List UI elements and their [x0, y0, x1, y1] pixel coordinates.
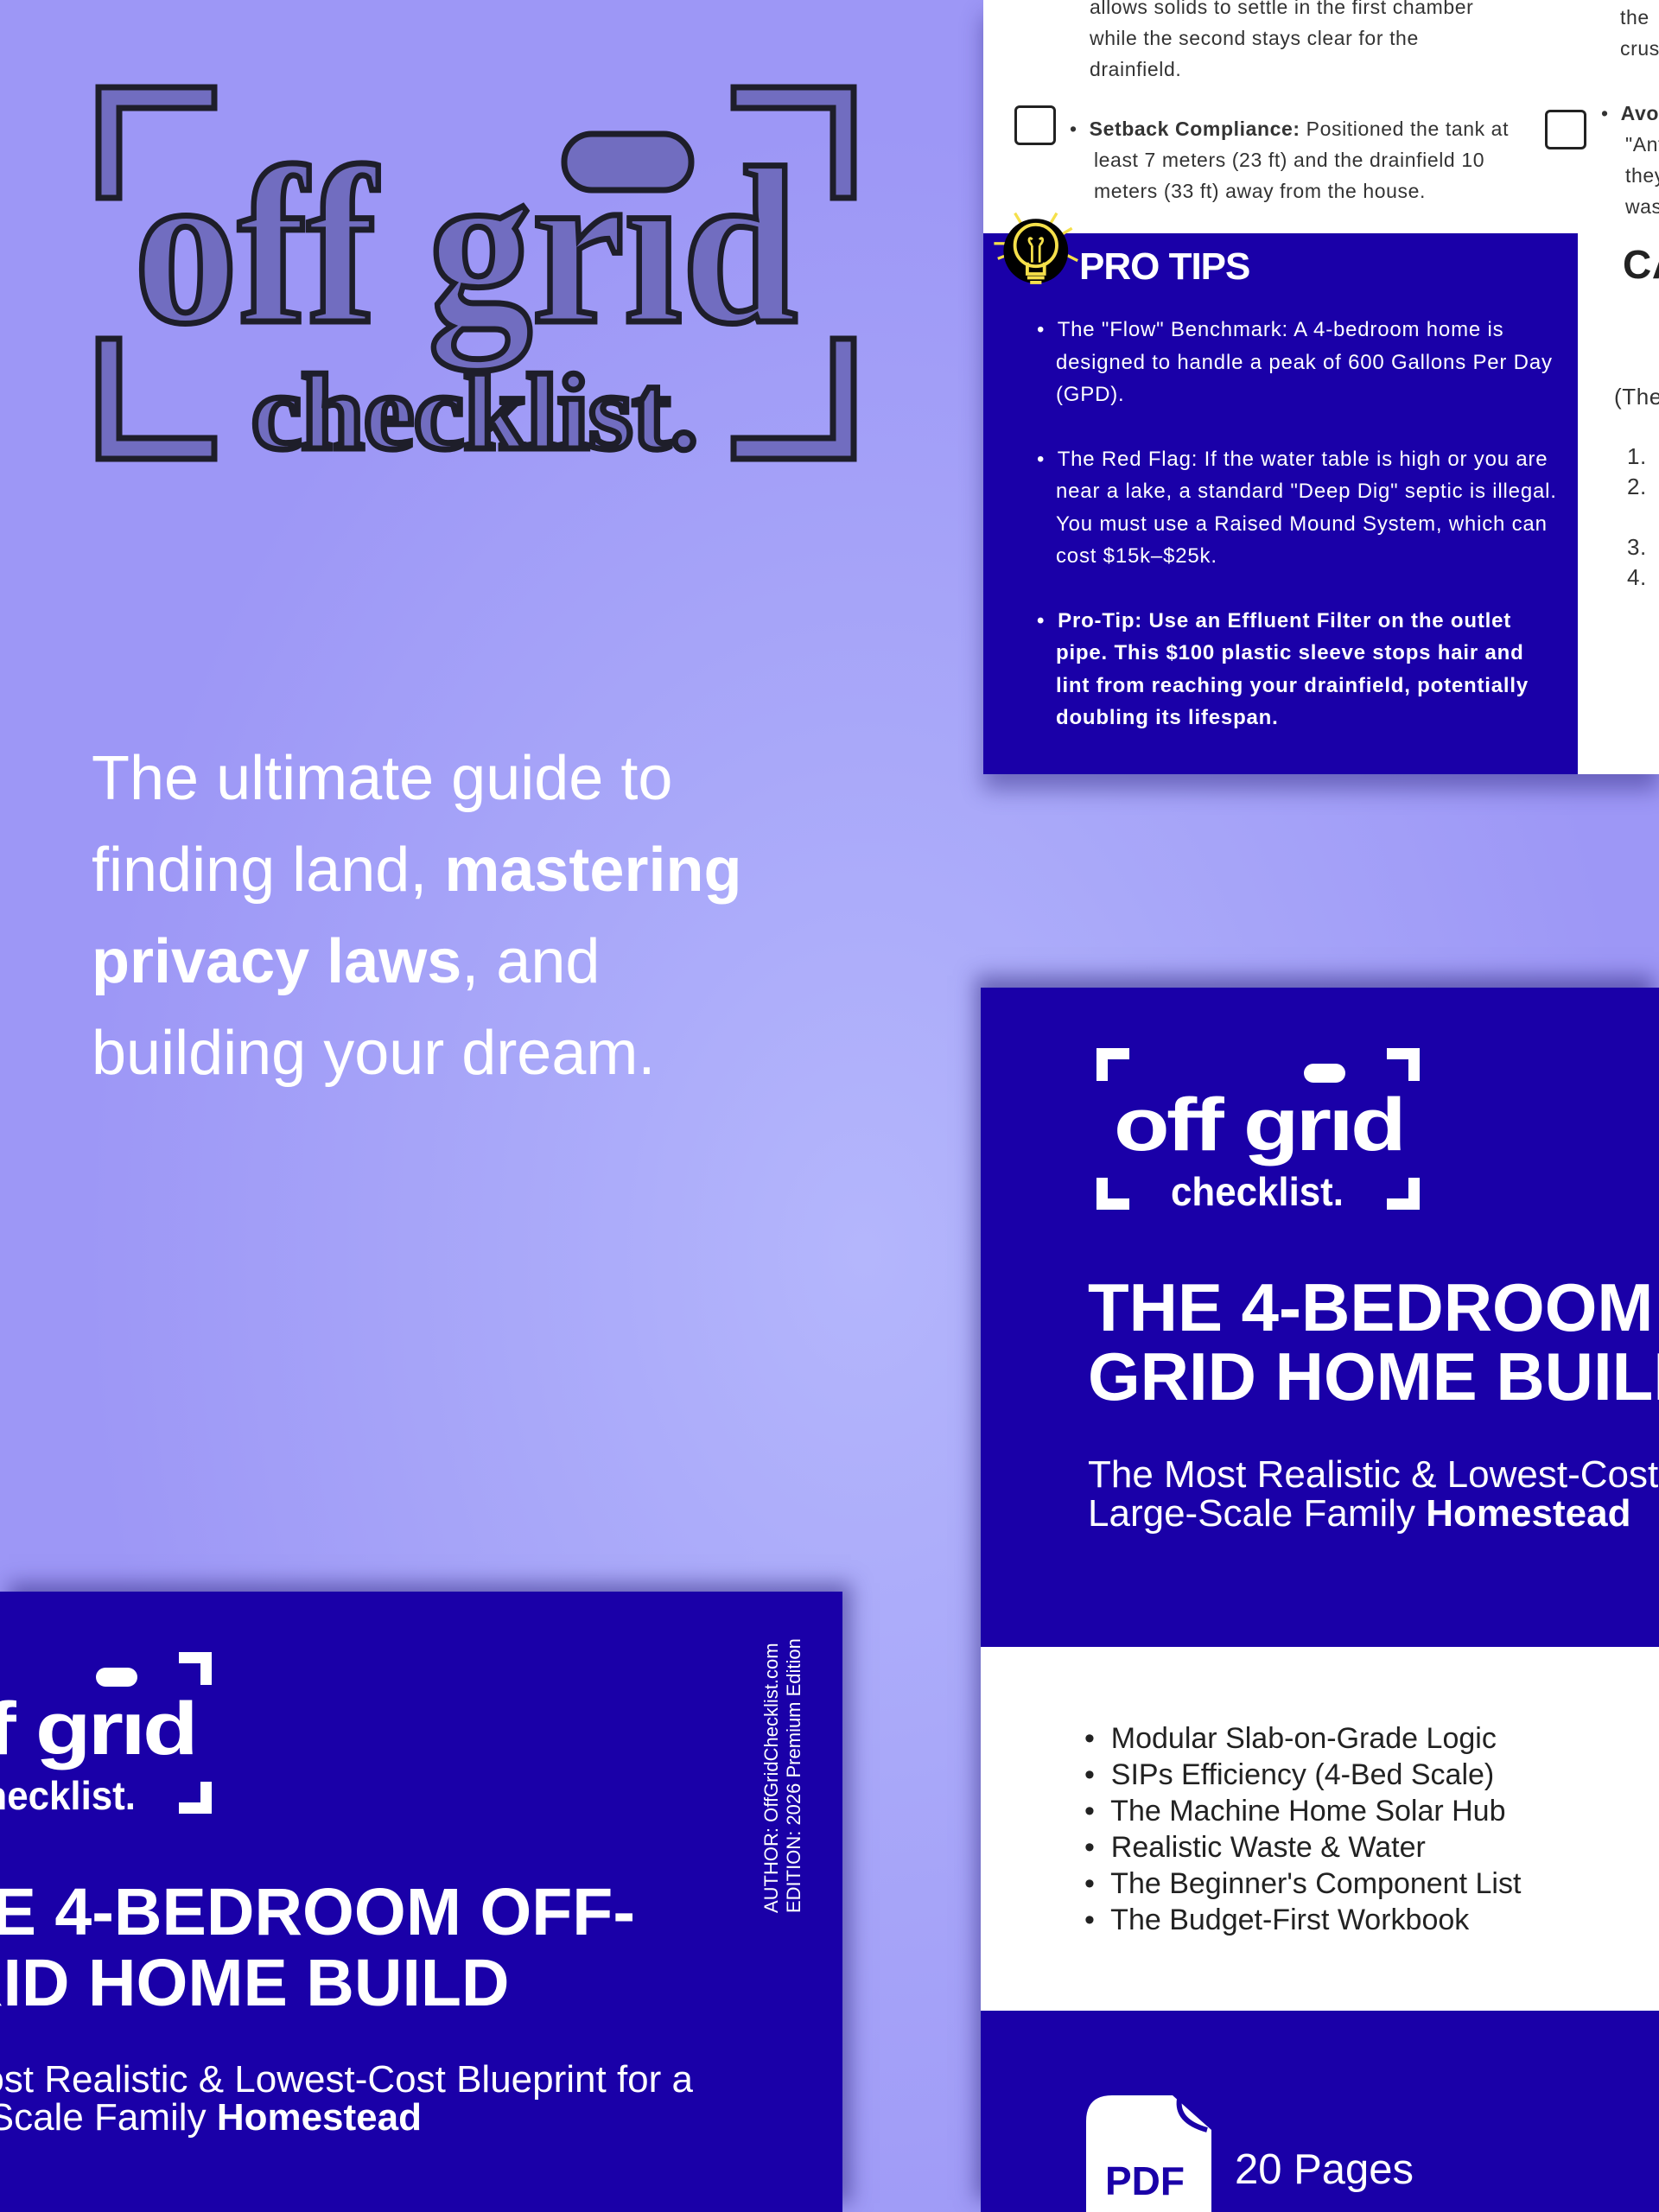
panel: top document page — [983, 0, 1659, 774]
tip list: You must use a Raised Mound System, which can — [1056, 512, 1548, 536]
icon: PDF document — [1086, 2095, 1211, 2212]
tip list: lint from reaching your drainfield, potentially — [1056, 674, 1529, 696]
text: setback compliance: least 7 meters (23 ft) and the drainfield 10 — [1094, 149, 1484, 171]
logo: engraved off grid checklist — [95, 85, 857, 473]
panel: left cover — [0, 1592, 842, 2212]
vertical author/edition text: EDITION: 2026 Premium Edition — [783, 1638, 804, 1913]
tip list: pipe. This $100 plastic sleeve stops hair and — [1056, 641, 1524, 664]
title — [1088, 1269, 1659, 1414]
title — [0, 1875, 635, 2020]
logo: engraved off grid checklist: checklist. — [251, 353, 698, 473]
contents list: • Modular Slab-on-Grade Logic — [1084, 1722, 1497, 1755]
right column text (cut off): crus — [1620, 37, 1659, 60]
tip list — [1037, 318, 1557, 729]
contents list — [1084, 1722, 1521, 1936]
contents list: • The Machine Home Solar Hub — [1084, 1795, 1506, 1827]
text: setback compliance: meters (33 ft) away from the house. — [1094, 180, 1426, 202]
vertical author/edition text: AUTHOR: OffGridChecklist.com — [760, 1643, 782, 1913]
heading: pro tips: PRO TIPS — [1079, 245, 1249, 288]
panel: pro tips — [983, 233, 1578, 774]
tagline: privacy laws, and — [92, 927, 600, 996]
panel: right cover — [981, 988, 1659, 2212]
tip list: • Pro-Tip: Use an Effluent Filter on the outlet — [1037, 608, 1511, 632]
contents list: • Realistic Waste & Water — [1084, 1831, 1426, 1864]
tip list: cost $15k–$25k. — [1056, 544, 1217, 568]
subtitle — [1088, 1453, 1659, 1535]
icon: PDF document: PDF — [1105, 2158, 1185, 2203]
text: septic chamber note: drainfield. — [1090, 58, 1181, 80]
text: septic chamber note — [1090, 0, 1473, 80]
checkbox 2 — [1545, 110, 1586, 149]
text: setback compliance: • Setback Compliance: Positioned the tank at — [1070, 118, 1509, 140]
right column text (cut off): the — [1620, 6, 1649, 29]
tip list: • The Red Flag: If the water table is high or you are — [1037, 448, 1548, 470]
contents list: • The Budget-First Workbook — [1084, 1904, 1469, 1936]
text: septic chamber note: while the second stays clear for the — [1090, 27, 1419, 49]
tip list: doubling its lifespan. — [1056, 706, 1279, 729]
tip list: near a lake, a standard "Deep Dig" septic is illegal. — [1056, 480, 1557, 503]
tagline: The ultimate guide to — [92, 744, 672, 813]
text: page count: 20 Pages — [1235, 2146, 1414, 2193]
panel: top document page: 4. — [1627, 564, 1647, 590]
checkbox 1 — [1014, 105, 1056, 145]
right column text (cut off) — [1620, 6, 1659, 60]
panel: top document page: 3. — [1627, 534, 1647, 560]
logo: white off grid checklist — [1096, 1048, 1420, 1212]
tagline — [92, 744, 741, 1088]
vertical author/edition text — [760, 1638, 804, 1913]
subtitle: Large-Scale Family Homestead — [1088, 1492, 1630, 1535]
tip list: • The "Flow" Benchmark: A 4-bedroom home is — [1037, 318, 1503, 341]
icon: lightbulb — [994, 213, 1078, 284]
text: setback compliance — [1070, 118, 1509, 202]
panel: top document page: 1. — [1627, 443, 1647, 469]
tip list: (GPD). — [1056, 383, 1124, 406]
panel: top document page: 2. — [1627, 474, 1647, 499]
tagline: finding land, mastering — [92, 836, 741, 905]
tip list: designed to handle a peak of 600 Gallons Per Day — [1056, 351, 1553, 373]
logo: white off grid checklist (cut off) — [0, 1652, 212, 1816]
contents list: • The Beginner's Component List — [1084, 1867, 1521, 1900]
tagline: building your dream. — [92, 1019, 655, 1088]
contents list: • SIPs Efficiency (4-Bed Scale) — [1084, 1758, 1494, 1791]
logo: engraved off grid checklist: off grıd — [134, 122, 798, 374]
logo: white off grid checklist: off grıd — [1114, 1084, 1403, 1166]
panel: top document page: • Avo — [1601, 102, 1659, 124]
